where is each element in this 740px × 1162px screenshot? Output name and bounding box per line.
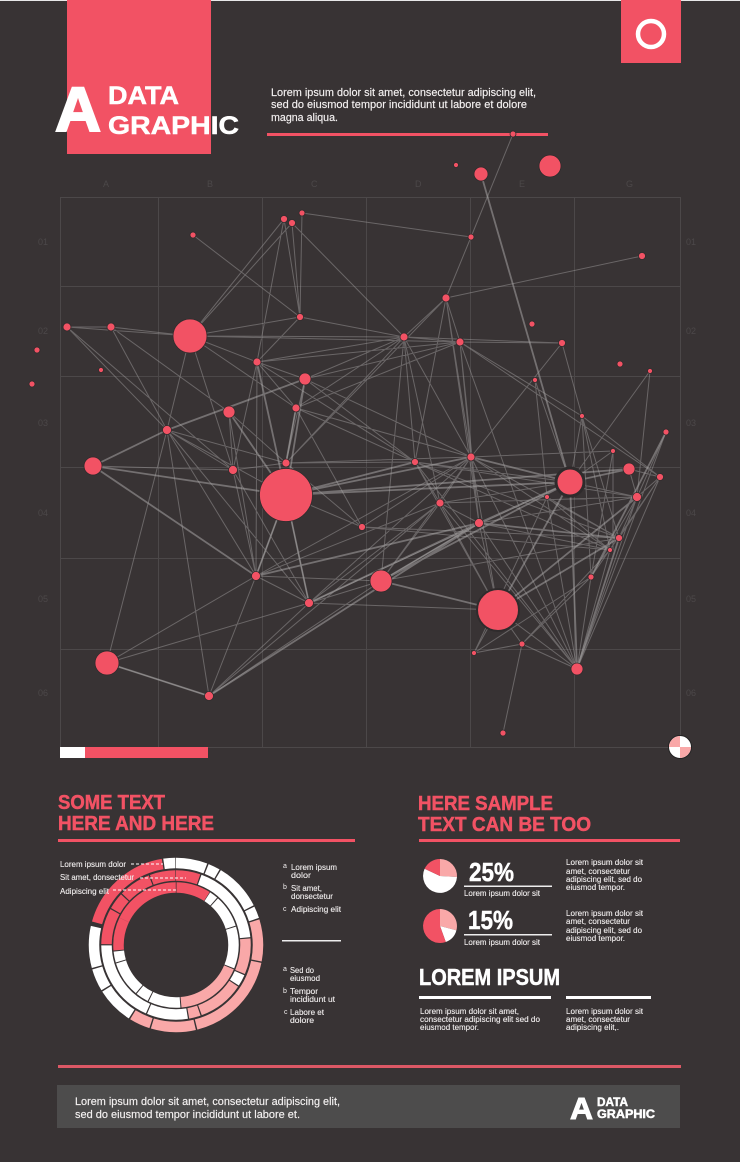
ring legend bottom: Tempor (290, 986, 318, 996)
grid row labels: 03 (38, 418, 48, 428)
heading: lorem ipsum: LOREM IPSUM (419, 964, 560, 990)
stat: 25%: Lorem ipsum dolor sit (464, 888, 541, 898)
intro text: Lorem ipsum dolor sit amet, consectetur adipiscing elit, (271, 87, 536, 99)
text block right column: adipiscing elit,. (566, 1022, 619, 1032)
grid row labels: 02 (686, 326, 696, 336)
ring legend bottom: c (284, 1009, 288, 1016)
text block 25%: amet, consectetur (566, 866, 630, 876)
text block left column: Lorem ipsum dolor sit amet, (420, 1006, 519, 1016)
footer logo: DATA (597, 1095, 628, 1109)
text block right column (566, 1006, 644, 1032)
inner ring (118, 888, 234, 1002)
ring legend bottom: eiusmod (290, 973, 320, 983)
heading rule left (58, 839, 355, 842)
ring legend top: dolor (291, 870, 311, 880)
text block 15%: adipiscing elit, sed do (566, 925, 642, 935)
grid column labels: E (519, 179, 525, 189)
ring legend bottom: b (283, 988, 287, 995)
text block left column (420, 1006, 540, 1032)
chart scale bar (60, 747, 208, 758)
logo: data graphic (55, 75, 239, 145)
ring callout labels: Lorem ipsum dolor (60, 859, 126, 869)
stat: 15% (464, 905, 552, 947)
network graph (29, 131, 669, 736)
ring legend top: Adipiscing elit (291, 904, 342, 914)
footer text: sed do eiusmod tempor incididunt ut labore et. (75, 1109, 300, 1121)
logo: data graphic: A (55, 75, 101, 145)
text block 25% (566, 857, 644, 892)
grid column labels: C (311, 179, 318, 189)
pie chart 25% (423, 859, 457, 893)
text block 15%: Lorem ipsum dolor sit (566, 908, 644, 918)
grid column labels: G (626, 179, 633, 189)
stat: 15%: Lorem ipsum dolor sit (464, 937, 541, 947)
ring callout labels: Sit amet, donsectetur (60, 872, 134, 882)
ring legend bottom: Sed do (290, 965, 314, 975)
ring legend top: Lorem ipsum (291, 862, 337, 872)
grid column labels: A (103, 179, 109, 189)
text block 15% (566, 908, 644, 943)
heading: here sample text can be too: TEXT CAN BE TOO (418, 814, 591, 836)
icon: quartered compass disc (668, 736, 692, 758)
ring chart (94, 863, 258, 1027)
ring callout labels (60, 859, 186, 896)
footer logo (570, 1091, 655, 1126)
heading: here sample text can be too: HERE SAMPLE (418, 793, 553, 815)
grid row labels: 01 (38, 237, 48, 247)
ring legend bottom: incididunt ut (290, 994, 336, 1004)
stat: 25% (464, 857, 552, 898)
ring legend bottom: dolore (290, 1015, 314, 1025)
outer ring (94, 863, 258, 1027)
grid row labels: 02 (38, 326, 48, 336)
intro text: magna aliqua. (271, 112, 338, 124)
ring legend bottom: a (283, 966, 287, 973)
heading rule right (419, 839, 680, 842)
legend divider (282, 940, 341, 942)
ring legend bottom: Labore et (290, 1007, 325, 1017)
grid column labels (103, 179, 633, 189)
text block 25%: adipiscing elit, sed do (566, 874, 642, 884)
corner tab with ring icon (621, 0, 681, 63)
ring legend top (283, 862, 342, 914)
chart grid (60, 197, 680, 748)
text block left column: consectetur adipiscing elit sed do (420, 1014, 540, 1024)
grid row labels: 03 (686, 418, 696, 428)
text block right column: Lorem ipsum dolor sit (566, 1006, 644, 1016)
middle ring (106, 876, 246, 1014)
footer rule (58, 1065, 681, 1068)
text block left column: eiusmod tempor. (420, 1022, 479, 1032)
stat: 15%: 15% (468, 905, 513, 935)
text block 25%: eiusmod tempor. (566, 882, 625, 892)
heading: here sample text can be too (418, 793, 591, 836)
grid row labels (38, 237, 696, 698)
network links (67, 134, 666, 733)
grid column labels: D (415, 179, 422, 189)
ring legend top: b (283, 884, 287, 891)
ring legend top: Sit amet, (291, 883, 322, 893)
footer text: Lorem ipsum dolor sit amet, consectetur adipiscing elit, (75, 1096, 340, 1108)
heading: some text here and here (58, 792, 214, 835)
heading: some text here and here: HERE AND HERE (58, 813, 214, 835)
footer logo: A (570, 1091, 593, 1126)
ring legend top: a (283, 863, 287, 870)
ring legend top: c (283, 906, 287, 913)
footer text (75, 1096, 340, 1121)
grid column labels: B (207, 179, 213, 189)
grid row labels: 05 (686, 594, 696, 604)
grid row labels: 01 (686, 237, 696, 247)
pie chart 15% (423, 909, 457, 943)
logo: data graphic: GRAPHIC (108, 112, 239, 140)
footer logo: GRAPHIC (597, 1107, 655, 1121)
text block 25%: Lorem ipsum dolor sit (566, 857, 644, 867)
ring legend bottom (283, 965, 336, 1025)
grid row labels: 05 (38, 594, 48, 604)
rules under lorem ipsum (419, 996, 651, 999)
grid row labels: 04 (38, 508, 48, 518)
heading: some text here and here: SOME TEXT (58, 792, 165, 814)
ring callout labels: Adipiscing elit (60, 886, 110, 896)
intro underline (267, 133, 548, 136)
stat: 25%: 25% (469, 857, 514, 887)
footer panel (57, 1085, 680, 1128)
logo: data graphic: DATA (108, 82, 179, 110)
intro text: sed do eiusmod tempor incididunt ut labore et dolore (271, 99, 527, 111)
grid row labels: 06 (38, 688, 48, 698)
intro text (271, 87, 536, 124)
text block 15%: amet, consectetur (566, 916, 630, 926)
text block right column: amet, consectetur (566, 1014, 630, 1024)
header red block (67, 0, 211, 154)
ring legend top: donsectetur (291, 891, 333, 901)
grid row labels: 04 (686, 508, 696, 518)
network nodes (29, 131, 669, 736)
text block 15%: eiusmod tempor. (566, 933, 625, 943)
grid row labels: 06 (686, 688, 696, 698)
